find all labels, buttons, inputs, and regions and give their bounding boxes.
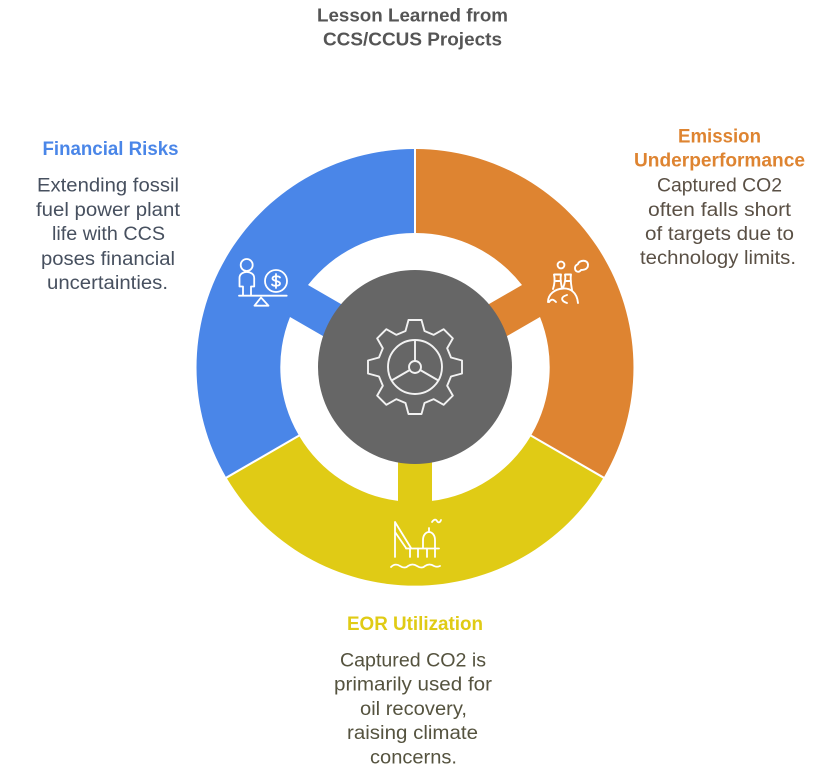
center circle (318, 270, 512, 464)
text block: financial risks (36, 176, 181, 294)
panel: EOR utilization segment (227, 436, 603, 586)
title: Lesson Learned from (317, 4, 508, 26)
icon: offshore oil platform (391, 520, 441, 568)
heading: emission underperformance: Emission (678, 126, 761, 148)
text block: EOR utilization: raising climate (347, 723, 478, 744)
title: CCS/CCUS Projects (323, 28, 502, 50)
heading: financial risks: Financial Risks (42, 139, 178, 160)
panel: emission underperformance segment (416, 149, 633, 477)
text block: financial risks: Extending fossil (37, 176, 179, 196)
text block: financial risks: life with CCS (52, 224, 165, 245)
text block: EOR utilization: Captured CO2 is (340, 650, 486, 672)
heading: emission underperformance: Underperformance (634, 150, 805, 172)
text block: emission underperformance: technology limits. (640, 248, 796, 269)
text block: emission underperformance (640, 176, 796, 269)
text block: emission underperformance: Captured CO2 (657, 176, 782, 196)
heading: emission underperformance (634, 126, 805, 172)
icon: cooling towers and emissions (548, 261, 588, 303)
text block: emission underperformance: often falls short (648, 200, 792, 221)
text block: financial risks: poses financial (41, 249, 175, 270)
title (317, 4, 508, 50)
icon: gear (368, 320, 462, 414)
panel: financial risks segment (197, 149, 414, 477)
text block: financial risks: uncertainties. (47, 273, 168, 294)
text block: emission underperformance: of targets due to (645, 224, 794, 245)
text block: EOR utilization (334, 650, 493, 768)
text block: EOR utilization: primarily used for (334, 674, 493, 696)
heading: EOR utilization: EOR Utilization (347, 614, 483, 635)
text block: financial risks: fuel power plant (36, 200, 181, 221)
text block: EOR utilization: concerns. (370, 748, 457, 768)
text block: EOR utilization: oil recovery, (360, 699, 467, 720)
icon: person and coin on scale (239, 259, 287, 306)
